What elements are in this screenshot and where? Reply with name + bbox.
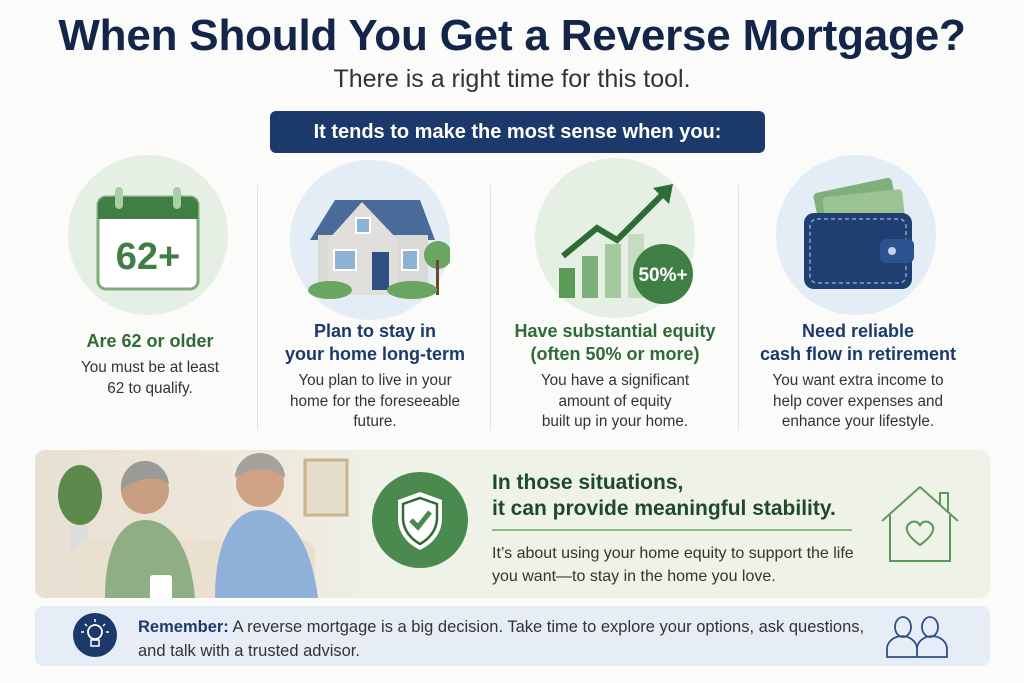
stability heading: [492, 471, 836, 520]
column 3 text: built up in your home.: [542, 413, 688, 430]
remember text: [138, 618, 864, 660]
column 4 text: cash flow in retirement: [760, 344, 956, 364]
icon: people: [886, 616, 948, 658]
column 4 text: [760, 321, 956, 430]
column 2 text: Plan to stay in: [314, 321, 436, 341]
icon: house: [290, 160, 450, 320]
panel: stability: [35, 450, 990, 598]
column 2 text: your home long-term: [285, 344, 465, 364]
column 4 text: Need reliable: [802, 321, 914, 341]
column 3 text: (often 50% or more): [530, 344, 700, 364]
stability heading: In those situations,: [492, 471, 683, 494]
column 3 text: You have a significant: [541, 372, 689, 389]
column 1 text: 62 to qualify.: [107, 380, 193, 396]
icon: calendar 62+: 62+: [116, 236, 180, 278]
banner: [270, 111, 765, 153]
column 4 text: enhance your lifestyle.: [782, 413, 934, 430]
column 3 text: Have substantial equity: [514, 321, 716, 341]
icon: growth chart: [535, 158, 695, 318]
stability body: It’s about using your home equity to support the life: [492, 545, 854, 562]
stability body: you want—to stay in the home you love.: [492, 568, 776, 585]
icon: calendar 62+: [68, 155, 228, 315]
column 2 text: [285, 321, 465, 430]
stability body: [492, 545, 854, 585]
subtitle: There is a right time for this tool.: [333, 65, 691, 93]
column 2 text: future.: [353, 413, 397, 430]
icon: lightbulb: [73, 613, 117, 657]
column 2 text: home for the foreseeable: [290, 392, 460, 410]
banner: It tends to make the most sense when you:: [314, 121, 721, 143]
stability heading: it can provide meaningful stability.: [492, 497, 836, 520]
column 4 text: You want extra income to: [772, 372, 944, 389]
photo: couple: [35, 450, 380, 598]
remember text: and talk with a trusted advisor.: [138, 642, 360, 660]
icon: house heart: [881, 486, 959, 562]
column 4 text: help cover expenses and: [773, 392, 943, 410]
column 1 text: You must be at least: [81, 359, 219, 376]
column 2 text: You plan to live in your: [298, 372, 452, 389]
column 1 text: Are 62 or older: [86, 331, 214, 351]
icon: growth chart: 50%+: [638, 265, 688, 286]
icon: shield check: [372, 472, 468, 568]
column 3 text: [514, 321, 716, 430]
column 1 text: [81, 331, 219, 396]
icon: wallet: [776, 155, 936, 315]
title: When Should You Get a Reverse Mortgage?: [58, 11, 966, 60]
column 3 text: amount of equity: [558, 392, 672, 410]
remember text: Remember: A reverse mortgage is a big decision. Take time to explore your options, ask questions,: [138, 618, 864, 636]
panel: remember: [35, 606, 990, 666]
